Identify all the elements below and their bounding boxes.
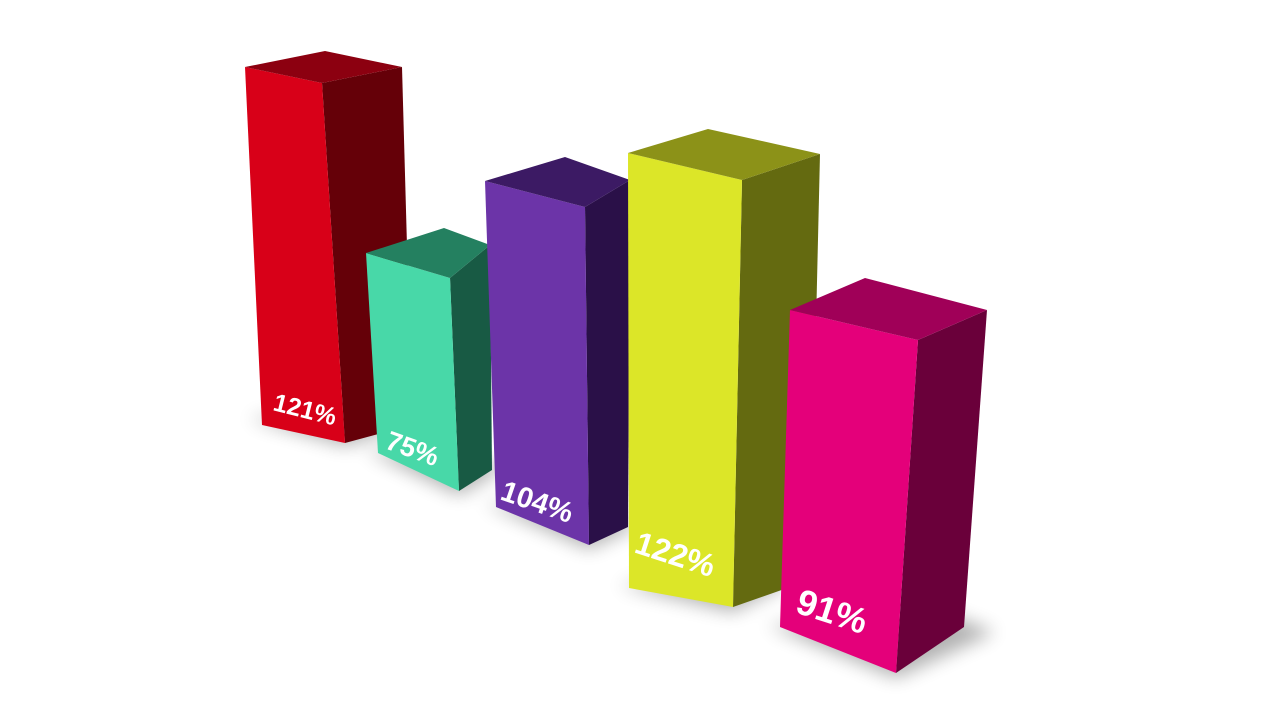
label: 122%: 122% [631,524,720,584]
bar: teal 75% [366,228,492,491]
bar: pink 91% [780,278,987,673]
label: 104%: 104% [497,475,577,530]
label: 91%: 91% [792,581,873,642]
label: 121%: 121% [271,389,339,431]
bar: red 121% [245,51,412,443]
bar: purple 104% [485,157,630,545]
shadows [248,410,995,678]
bar: yellow 122% [628,129,820,607]
label: 75%: 75% [382,425,443,472]
